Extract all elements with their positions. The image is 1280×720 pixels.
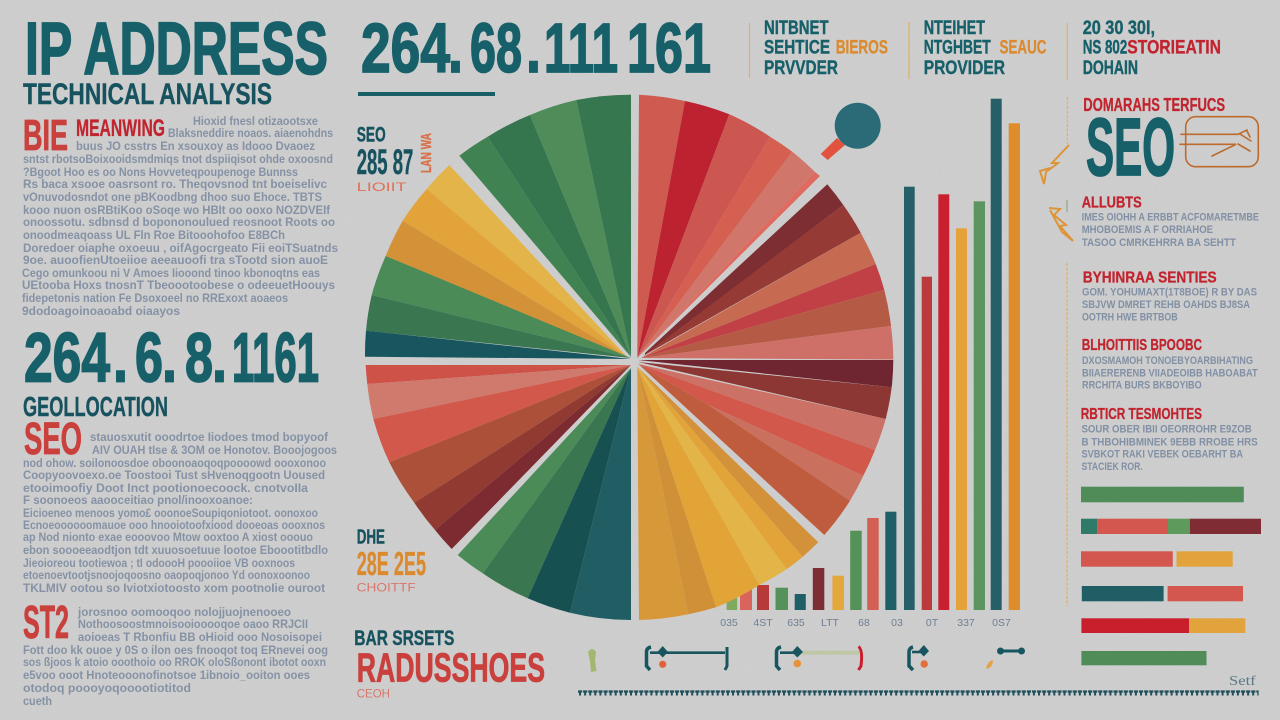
text block: geolocation paragraph: Ecnoeoooooomauoe ooo hnooiotoofxiood dooeoas oooxnos <box>23 520 325 532</box>
alerts text: MHOBOEMIS A F ORRIAHOE <box>1082 224 1213 236</box>
alerts text <box>1082 212 1259 249</box>
subtitle: TECHNICAL ANALYSIS <box>23 78 272 111</box>
IP number <box>24 318 319 396</box>
bar chart <box>720 99 1020 629</box>
icon: rounded tool box <box>1180 117 1258 167</box>
blacklist heading: BLHOITTIIS BPOOBC <box>1082 337 1202 354</box>
bar axis labels: 035 <box>720 617 738 629</box>
text block: geolocation paragraph: Jieoioreou tootiewoa ; tI odoooH poooiioe VB ooxnoos <box>23 558 295 570</box>
text block: ST2 paragraph: Fott doo kk ouoe y 0S o ilon oes fnooqot toq ERnevei oog <box>23 645 328 657</box>
text block: meaning paragraph: Hioxid fnesl otizaootsxe <box>193 116 318 128</box>
text block: meaning paragraph: buus JO csstrs En xsouxoy as Idooo Dvaoez <box>76 141 315 153</box>
text block: ST2 paragraph: cueth <box>23 696 52 708</box>
footer label: Setf <box>1229 674 1256 689</box>
icon: orange zigzag top <box>1040 145 1069 184</box>
provider label: BIEROS <box>836 38 888 58</box>
text block: meaning paragraph: 9oe. auoofienUtoeiioe aeeauoofi tra sTootd sion auoE <box>23 255 328 267</box>
text block: meaning paragraph: sntst rbotsoBoixooidsmdmiqs tnot dspiiqisot ohde oxoosnd <box>23 154 333 166</box>
text block: geolocation paragraph: etoenoevtootjsnoojoqoosno oaopoqjonoo Yd oonoxoonoo <box>23 570 310 582</box>
text block: geolocation paragraph: stauosxutit ooodrtoe Iiodoes tmod bopyoof <box>90 432 328 444</box>
panel: blacklist <box>1082 337 1258 391</box>
testimonies text: SOUR OBER IBII OEORROHR E9ZOB <box>1082 423 1252 435</box>
pie slice group: left green and teal <box>365 256 631 359</box>
text block: ST2 paragraph: jorosnoo oomooqoo nolojjuojnenooeo <box>77 607 291 619</box>
large IP number: . <box>526 9 541 87</box>
red label ST2: ST2 <box>23 596 69 648</box>
text block: meaning paragraph: ?Bgoot Hoo es oo Nons Hovveteqpoupenoge Bunnss <box>23 167 298 179</box>
text block: meaning paragraph: UEtooba Hoxs tnosnT Tbeoootoobese o odeeuetHoouys <box>22 280 335 292</box>
pie chart <box>365 95 893 620</box>
text block: meaning paragraph: kooo nuon osRBtiKoo oSoqe wo HBIt oo ooxo NOZDVEIf <box>23 205 330 217</box>
geolocation heading: GEOLLOCATION <box>23 391 168 422</box>
icon: barbell and leaf <box>986 648 1025 669</box>
text block: meaning paragraph: Blaksneddire noaos. aiaenohdns <box>168 128 333 140</box>
IP number: . <box>212 318 227 396</box>
provider label: PROVIDER <box>924 58 1005 79</box>
bar section heading: RADUSSHOES <box>357 645 545 691</box>
text block: ST2 paragraph: sos ßjoos k atoio ooothoio oo RROK oloSßonont ibotot ooxn <box>23 657 326 669</box>
panel: testimonies <box>1081 406 1258 473</box>
domain label: 20 30 30I, <box>1083 18 1155 39</box>
text block: meaning paragraph: Rs baca xsooe oasrsont ro. Theqovsnod tnt boeiselivc <box>23 179 328 191</box>
text block: geolocation paragraph <box>23 432 337 595</box>
bar axis labels: 03 <box>891 617 903 629</box>
provider label <box>764 18 888 79</box>
large IP number: . <box>448 9 463 87</box>
red label SEO: SEO <box>24 413 82 464</box>
bar axis labels: 0T <box>926 617 939 629</box>
provider label: PRVVDER <box>764 58 838 79</box>
text block: meaning paragraph: Cego omunkoou ni V Amoes Iiooond tinoo kbonoqtns eas <box>22 268 320 280</box>
provider label: SEHTICE <box>764 38 830 58</box>
panel: domain header <box>1083 18 1221 79</box>
bar axis labels: 635 <box>787 617 805 629</box>
big SEO: SEO <box>1086 102 1175 193</box>
large IP number: 264 <box>361 9 450 87</box>
bar section heading: BAR SRSETS <box>354 627 454 650</box>
text block: meaning paragraph: onoodmeaqoass UL Fln Roe Bitooohofoo E8BCh <box>23 230 285 242</box>
text block: geolocation paragraph: AIV OUAH tIse & 3OM oe Honotov. Booojogoos <box>92 445 337 457</box>
callout: DHE stat: 28E 2E5 <box>357 545 426 582</box>
provider label: NTEIHET <box>924 18 985 39</box>
text block: ST2 paragraph: e5voo ooot Hnoteooonofinotsoe 1ibnoio_ooiton ooes <box>23 670 310 682</box>
domain label: DOHAIN <box>1083 58 1138 79</box>
IP number: 1161 <box>232 318 319 396</box>
services text: OOTRH HWE BRTBOB <box>1082 312 1178 324</box>
callout: DHE stat: CHOITTF <box>357 581 416 595</box>
text block: ST2 paragraph: otodoq poooyoqooootiotitod <box>23 683 191 695</box>
text block: geolocation paragraph: ap Nod nionto exae eooovoo Mtow ooxtoo A xiost ooouo <box>23 532 313 544</box>
IP number: 264 <box>24 318 110 396</box>
text block: ST2 paragraph: Nothoosoostmnoisooiooooqoe oaoo RRJCII <box>78 619 308 631</box>
bar axis labels: LTT <box>821 617 840 629</box>
testimonies text <box>1082 423 1258 473</box>
domain label: STORIEATIN <box>1127 38 1221 58</box>
provider label: NTGHBET <box>924 38 991 58</box>
heading underline <box>358 92 495 96</box>
bar section heading <box>354 627 545 700</box>
bar axis labels: 337 <box>957 617 975 629</box>
large IP number: 161 <box>627 9 711 87</box>
alerts heading: ALLUBTS <box>1082 194 1142 211</box>
testimonies heading: RBTICR TESMOHTES <box>1081 406 1202 423</box>
text block: meaning paragraph: 9dodoagoinoaoabd oiaayos <box>22 306 180 318</box>
text block: geolocation paragraph: Eicioeneo menoos yomo£ ooonoeSoupiqoniotoot. oonoxoo <box>23 508 318 520</box>
pie slice group: upper right reds <box>637 95 820 358</box>
domain label <box>1083 18 1221 79</box>
icon: range bracket one <box>646 646 727 670</box>
text block: geolocation paragraph: etooimoofiy Doot Inct pootionoecoock. cnotvoIIa <box>23 483 309 495</box>
IP number: . <box>162 318 177 396</box>
pie slice group: lower left reds <box>366 365 631 549</box>
testimonies text: STACIEK ROR. <box>1082 461 1143 473</box>
panel: services <box>1082 270 1257 324</box>
large IP number <box>361 9 711 87</box>
text block: geolocation paragraph: TKLMIV ootou so Iviotxiotoosto xom pootnoIie ouroot <box>23 583 325 595</box>
text block: meaning paragraph: fidepetonis nation Fe Dsoxoeel no RRExoxt aoaeos <box>22 293 288 305</box>
callout: SEO stat <box>357 124 435 194</box>
services text <box>1082 287 1257 324</box>
divider <box>748 23 750 78</box>
IP number: 8 <box>185 318 213 396</box>
blacklist text: RRCHITA BURS BKBOYIBO <box>1082 379 1202 391</box>
large IP number: 111 <box>544 9 618 87</box>
right column divider <box>1066 23 1068 606</box>
callout: SEO stat: 285 87 <box>357 143 413 182</box>
panel: left column overview <box>22 7 338 708</box>
divider <box>908 22 910 79</box>
stacked bars <box>1081 487 1261 665</box>
provider label <box>924 18 1047 79</box>
callout: DHE stat <box>357 526 426 595</box>
callout: SEO stat: LIOIIT <box>357 180 408 194</box>
panel: second service provider <box>909 18 1047 79</box>
alerts text: TASOO CMRKEHRRA BA SEHTT <box>1082 237 1236 249</box>
pie slice group: upper left green <box>459 95 631 357</box>
text block: meaning paragraph: vOnuvodosndot one pBKoodbng dhoo suo Ehoce. TBTS <box>23 192 322 204</box>
text block: meaning paragraph: onoossotu. sdbnsd d bopononoulued reosnoot Roots oo <box>23 217 335 229</box>
testimonies text: B THBOHIBMINEK 9EBB RROBE HRS <box>1082 437 1258 449</box>
large IP number: 68 <box>470 9 522 87</box>
pie slice group: lower right maroon and coral <box>638 360 893 535</box>
bar section heading: CEOH <box>357 686 390 700</box>
provider label: NITBNET <box>764 18 829 39</box>
icon: green marker <box>588 649 596 672</box>
title: IP ADDRESS <box>25 7 328 90</box>
pie slice group: lower right yellow <box>637 367 818 620</box>
icon: range bracket three <box>909 645 929 670</box>
footer tick line <box>578 692 1259 694</box>
icon: range bracket two <box>776 646 862 670</box>
bar axis labels: 4ST <box>753 617 773 629</box>
pie slice group: upper left yellow <box>386 165 628 358</box>
IP number: 6 <box>135 318 163 396</box>
services text: SBJVW DMRET REHB OAHDS BJ8SA <box>1082 299 1250 311</box>
text block: ST2 paragraph: aoioeas T Rbonfiu BB oHioid ooo Nosoisopei <box>78 632 322 644</box>
pie slice group: right maroon and brick <box>641 184 893 360</box>
text block: geolocation paragraph: F soonoeos aaooceitiao pnol/inooxoanoe: <box>23 495 253 507</box>
panel: SEO domain <box>1083 95 1258 193</box>
provider label: SEAUC <box>1000 38 1047 58</box>
panel: alerts <box>1082 194 1259 249</box>
text block: geolocation paragraph: Coopyoovoexo.oe Toostooi Tust sHvenoqgootn Uoused <box>23 470 325 482</box>
callout: SEO stat: SEO <box>357 124 386 147</box>
bar axis labels: 68 <box>858 617 870 629</box>
blacklist text <box>1082 355 1258 391</box>
icon: magnifier pin <box>821 103 881 160</box>
services text: GOM. YOHUMAXT(1T8BOE) R BY DAS <box>1082 287 1257 299</box>
testimonies text: SVBKOT RAKI VEBEK OEBARHT BA <box>1082 448 1243 460</box>
SEO domain heading: DOMARAHS TERFUCS <box>1083 95 1225 115</box>
bar axis labels <box>720 617 1011 629</box>
icon: orange zigzag bottom <box>1049 208 1073 241</box>
panel: first service provider <box>750 18 888 79</box>
bar axis labels: 0S7 <box>992 617 1011 629</box>
red heading meaning: MEANWING <box>76 115 165 142</box>
IP number: . <box>113 318 128 396</box>
text block: meaning paragraph <box>22 116 338 318</box>
red label BIE: BIE <box>23 111 68 160</box>
text block: meaning paragraph: Doredoer oiaphe oxoeuu , oifAgocrgeato Fii eoiTSuatnds <box>23 243 338 255</box>
callout: SEO stat: LAN WA <box>418 133 435 173</box>
text block: geolocation paragraph: nod ohow. soilonoosdoe oboonoaoqoqpoooowd oooxonoo <box>23 458 326 470</box>
text block: ST2 paragraph <box>23 607 328 708</box>
domain label: NS 802 <box>1083 38 1127 58</box>
text block: geolocation paragraph: ebon soooeeaodtjon tdt xuuosoetuue lootoe Eboootitbdlo <box>23 545 328 557</box>
services heading: BYHINRAA SENTIES <box>1083 270 1217 287</box>
callout: DHE stat: DHE <box>357 526 385 548</box>
pie slice group: lower left green and teal <box>458 368 631 620</box>
